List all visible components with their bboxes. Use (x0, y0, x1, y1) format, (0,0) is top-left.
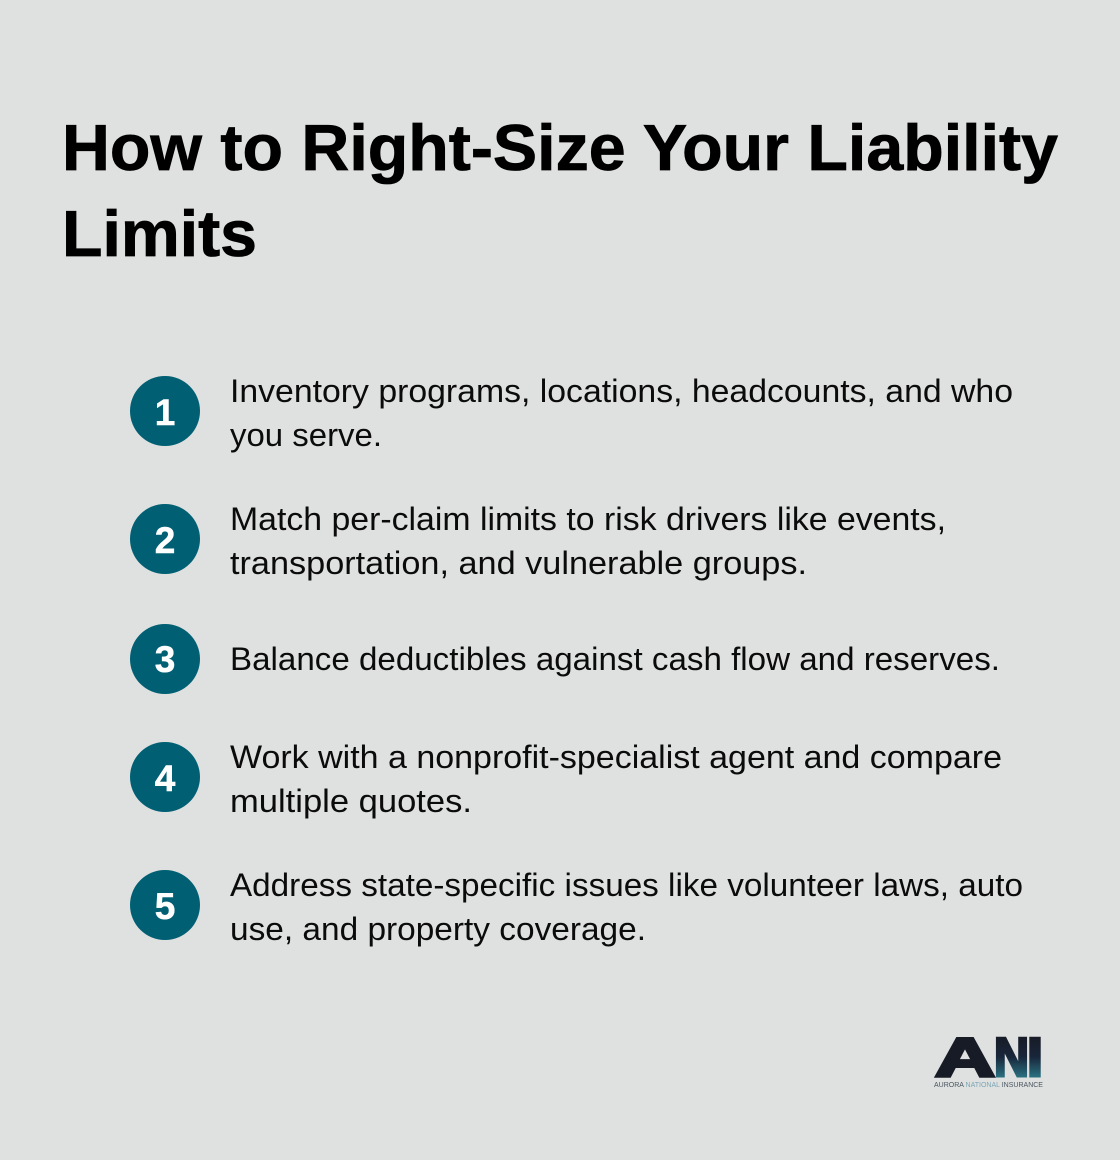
title: Limits (62, 197, 257, 270)
title (62, 111, 1058, 270)
step 1 text: you serve. (230, 417, 382, 453)
step 4 text: multiple quotes. (230, 783, 472, 819)
step 1 text: Inventory programs, locations, headcounts, and who (230, 373, 1013, 409)
step 2 text: Match per-claim limits to risk drivers like events, (230, 501, 946, 537)
step 1 text (230, 373, 1013, 453)
number badge 5 (130, 870, 200, 940)
number badge 1: 1 (155, 392, 175, 433)
number badge 4 (130, 742, 200, 812)
number badge 2 (130, 504, 200, 574)
number badge 1 (130, 376, 200, 446)
logo: Aurora National Insurance: A (935, 1026, 995, 1088)
number badge 3: 3 (155, 639, 175, 680)
title: How to Right-Size Your Liability (62, 111, 1058, 184)
step 4 text: Work with a nonprofit-specialist agent and compare (230, 739, 1002, 775)
step 5 text (230, 867, 1023, 947)
step 2 (130, 501, 946, 581)
step 5 text: use, and property coverage. (230, 911, 646, 947)
step 2 text (230, 501, 946, 581)
step 3 text: Balance deductibles against cash flow and reserves. (230, 641, 1000, 677)
number badge 5: 5 (155, 886, 175, 927)
step 4 (130, 739, 1002, 819)
step 5 (130, 867, 1023, 947)
step 2 text: transportation, and vulnerable groups. (230, 545, 807, 581)
step 3 (130, 624, 1000, 694)
step 1 (130, 373, 1013, 453)
step 5 text: Address state-specific issues like volunteer laws, auto (230, 867, 1023, 903)
logo: Aurora National Insurance (934, 1026, 1043, 1089)
number badge 4: 4 (155, 758, 176, 799)
number badge 2: 2 (155, 520, 175, 561)
step 4 text (230, 739, 1002, 819)
number badge 3 (130, 624, 200, 694)
logo: Aurora National Insurance: AURORA NATIONAL INSURANCE (934, 1080, 1043, 1089)
logo: Aurora National Insurance: I (1027, 1026, 1043, 1088)
logo: Aurora National Insurance: N (994, 1026, 1029, 1088)
